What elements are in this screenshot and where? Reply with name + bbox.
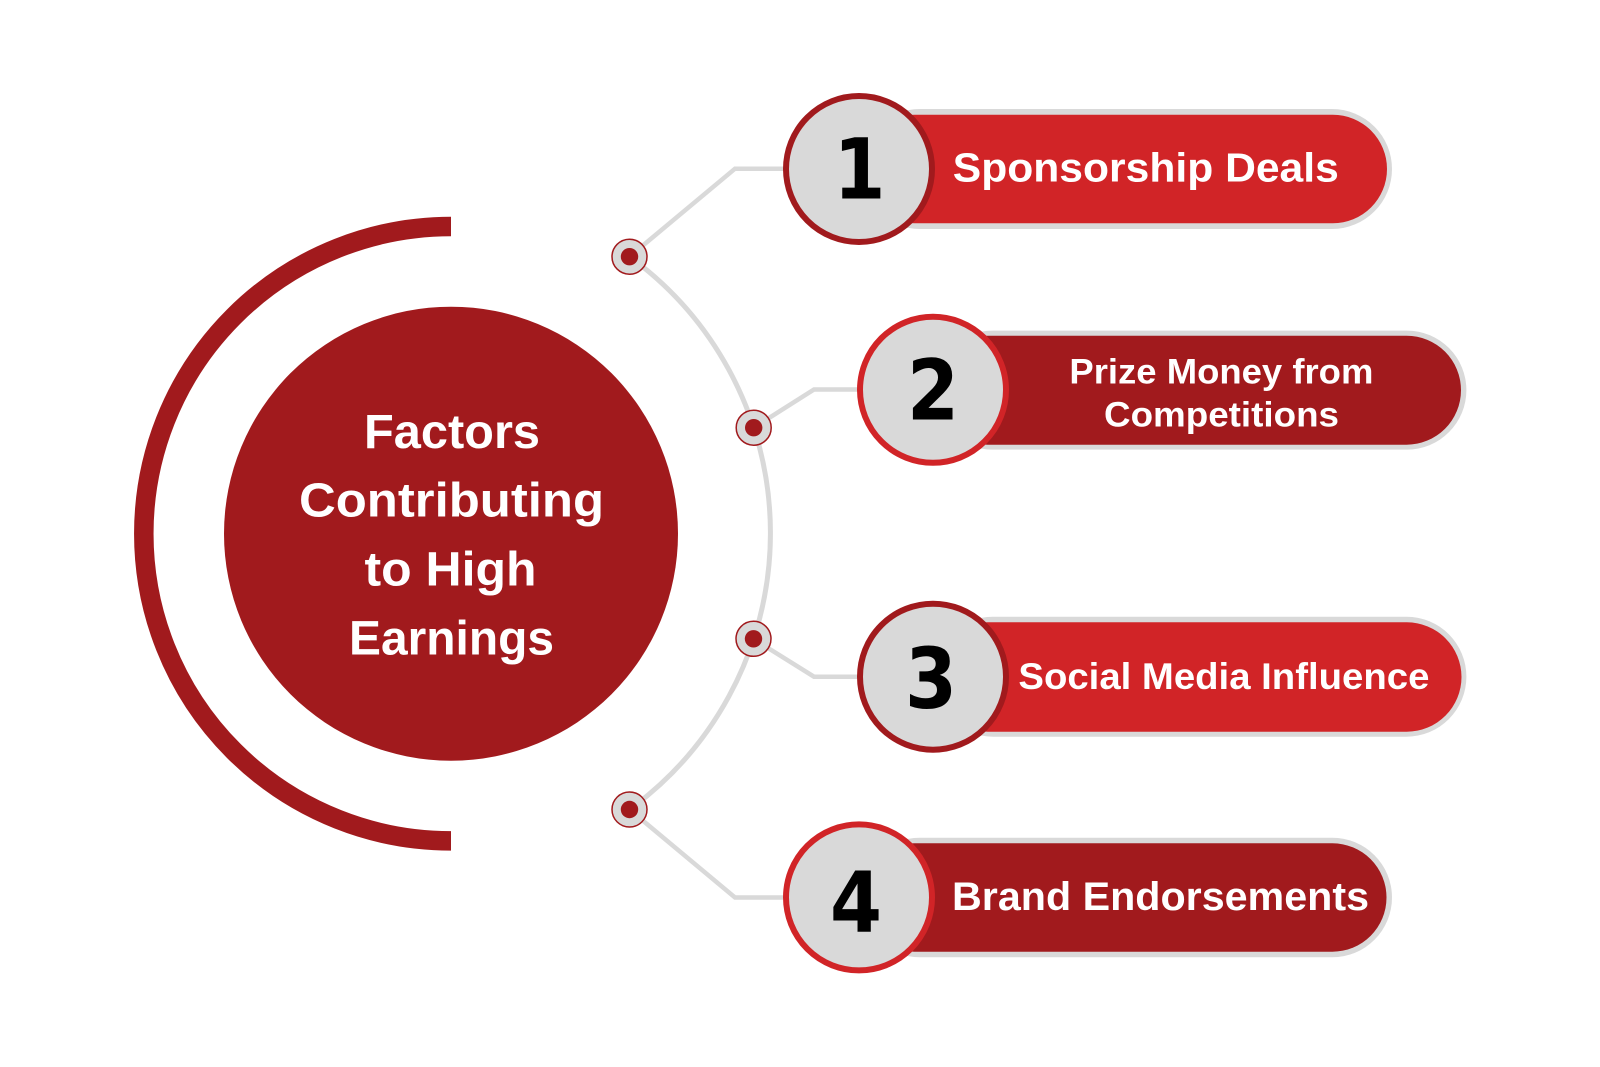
title: Earnings [349,612,554,666]
outer arc [144,226,451,841]
label 4: Brand Endorsements [952,875,1369,919]
connector arc [630,257,770,810]
badge 4: 4 [830,854,882,952]
central circle with title [224,307,678,761]
badge 3 [860,604,1006,750]
label 1: Sponsorship Deals [953,145,1339,191]
badge 2: 2 [907,342,959,440]
badge 2 [860,317,1006,463]
node dot 3 [736,621,771,656]
label 2: Competitions [1104,396,1339,434]
item 3: Social Media Influence [860,604,1466,750]
title: Contributing [299,475,604,528]
badge 3: 3 [905,630,957,728]
badge 1: 1 [834,120,886,218]
node dot 2 [736,410,771,445]
label 3: Social Media Influence [1018,656,1429,697]
node dot 1 [612,239,647,274]
item 4: Brand Endorsements [786,824,1392,970]
item 2: Prize Money from Competitions [860,317,1466,463]
connector line 1 [630,169,800,257]
connector line 3 [753,639,880,677]
node dot 4 [612,792,647,827]
badge 4 [786,824,932,970]
connector line 2 [754,390,880,428]
label 2: Prize Money from [1069,353,1373,392]
connector line 4 [630,810,800,898]
label 2 [1069,353,1373,434]
title: Factors [364,406,540,459]
title [299,406,604,666]
item 1: Sponsorship Deals [786,96,1392,242]
title: to High [364,544,536,596]
badge 1 [786,96,932,242]
